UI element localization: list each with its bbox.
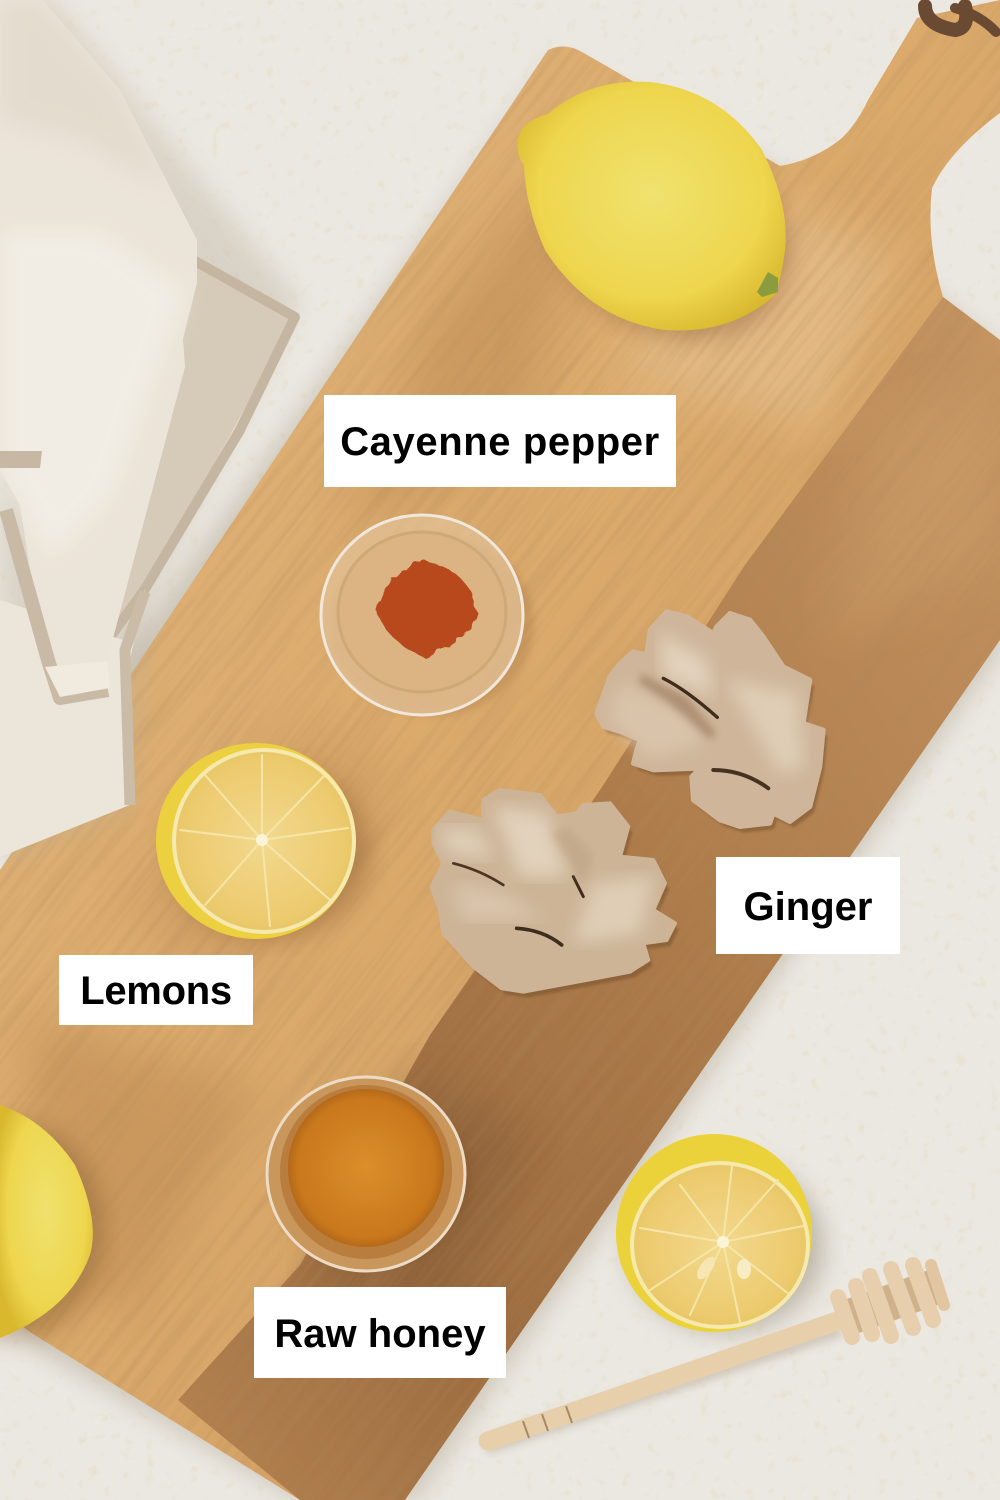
honey xyxy=(288,1089,444,1247)
label: ginger xyxy=(716,857,900,954)
napkin: hems xyxy=(0,451,42,468)
cayenne powder xyxy=(376,561,477,658)
label: lemons xyxy=(59,955,253,1025)
label: cayenne pepper: Cayenne pepper xyxy=(340,420,660,464)
lemon: whole top xyxy=(513,82,827,379)
label: lemons: Lemons xyxy=(80,969,232,1013)
napkin: lower layer xyxy=(0,589,145,857)
dark wood section xyxy=(178,290,1000,1500)
ginger: bottom xyxy=(432,790,679,998)
wood shading xyxy=(358,200,569,516)
cayenne bowl xyxy=(321,515,534,716)
napkin xyxy=(0,0,300,865)
napkin: back layer xyxy=(60,261,295,690)
label: cayenne pepper xyxy=(324,395,676,487)
napkin: top fold xyxy=(0,0,197,667)
lemon half: bottom right xyxy=(616,1134,824,1332)
ginger: top xyxy=(597,612,827,833)
honey bowl xyxy=(267,1077,472,1271)
label: raw honey xyxy=(254,1287,506,1378)
lemon: whole bottom left xyxy=(0,1105,103,1340)
honey dipper xyxy=(485,1265,944,1446)
label: raw honey: Raw honey xyxy=(274,1312,486,1356)
label: ginger: Ginger xyxy=(744,884,872,928)
leather strap xyxy=(925,6,996,32)
lemon half: left xyxy=(156,743,370,939)
